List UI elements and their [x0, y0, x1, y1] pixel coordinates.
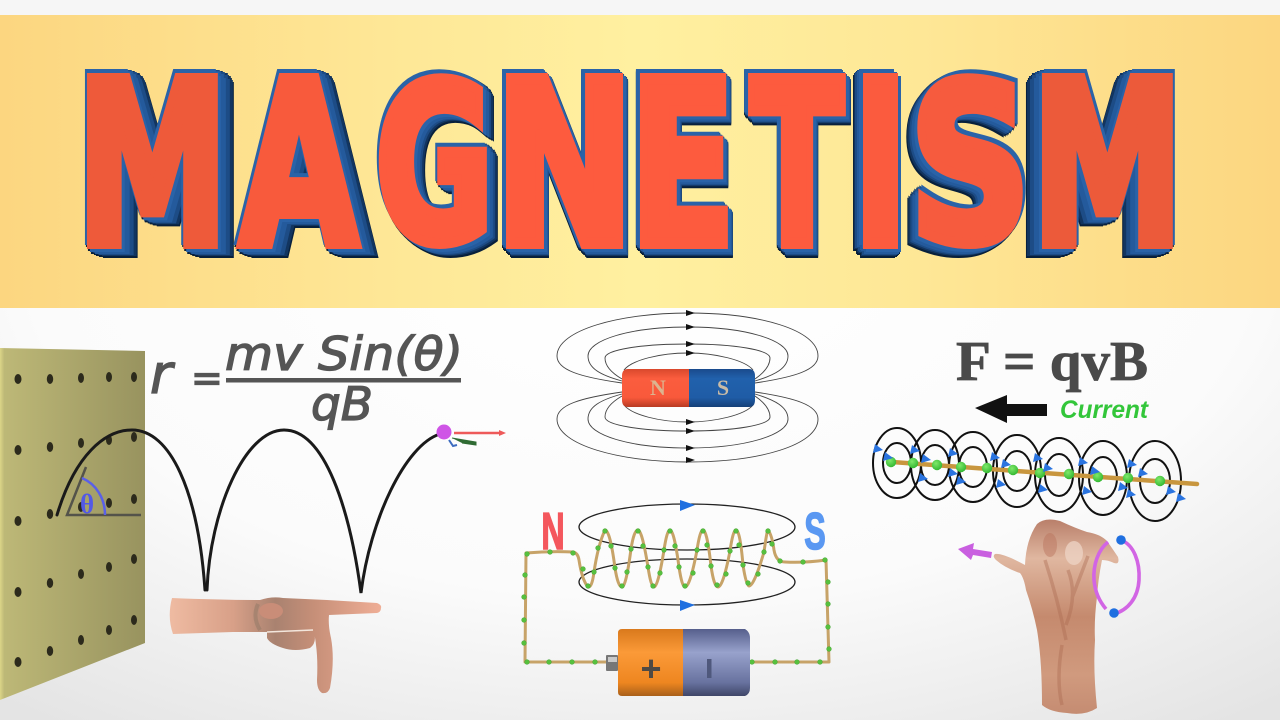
title: MAGNETISM: E [630, 33, 735, 297]
field loops with arrows [579, 500, 795, 611]
arrow: current direction [975, 395, 1047, 423]
title: MAGNETISM: T [751, 34, 843, 297]
panel: solenoid circuit [522, 500, 831, 696]
concentric magnetic field rings [873, 428, 1181, 521]
right hand gripping [994, 520, 1118, 714]
straight wire [892, 462, 1197, 484]
label: Current: Current [1060, 396, 1150, 424]
battery: + [640, 648, 662, 689]
battery [606, 629, 750, 696]
panel: bar magnet and field lines [557, 310, 818, 463]
bar magnet: S [717, 375, 729, 400]
coil wire [525, 530, 829, 662]
field loop around the hand [1094, 535, 1139, 618]
title: MAGNETISM: I [853, 34, 908, 297]
pointing right hand [170, 597, 381, 693]
green charges on the wire [886, 457, 1165, 486]
pole label S: S [804, 503, 826, 561]
field direction arrowheads [686, 310, 695, 463]
formula: F = qvB: F = qvB [956, 331, 1148, 393]
angle marker with theta [67, 467, 141, 519]
title: MAGNETISM: M [77, 35, 228, 297]
title: MAGNETISM: S [909, 38, 1031, 292]
field lines [557, 313, 818, 462]
title: MAGNETISM: G [375, 38, 494, 292]
particle with velocity and force arrows [436, 424, 506, 446]
angle marker with theta: θ [80, 489, 94, 519]
formula: r = mv Sin(θ) / qB: mv Sin(θ) [225, 327, 463, 381]
panel: current-carrying wire and right-hand rule [873, 331, 1197, 714]
pole label N: N [541, 503, 565, 561]
formula: r = mv Sin(θ) / qB: r [150, 343, 175, 406]
title: MAGNETISM: N [495, 34, 634, 297]
panel: charged particle in magnetic field [0, 327, 506, 700]
title: MAGNETISM: A [240, 35, 358, 297]
blue field arrowheads [873, 444, 1186, 502]
bar magnet: N [650, 375, 666, 400]
formula: r = mv Sin(θ) / qB [150, 327, 463, 431]
formula: r = mv Sin(θ) / qB: qB [311, 377, 373, 431]
title: MAGNETISM [77, 33, 1183, 297]
bar magnet [622, 369, 755, 407]
current dots [522, 529, 831, 664]
formula: r = mv Sin(θ) / qB: = [191, 356, 223, 400]
title banner [0, 0, 1280, 308]
purple thumb direction arrow [958, 543, 992, 560]
title: MAGNETISM: M [1032, 35, 1183, 297]
helical trajectory [57, 430, 440, 593]
magnetic field wall with dots [0, 348, 145, 700]
